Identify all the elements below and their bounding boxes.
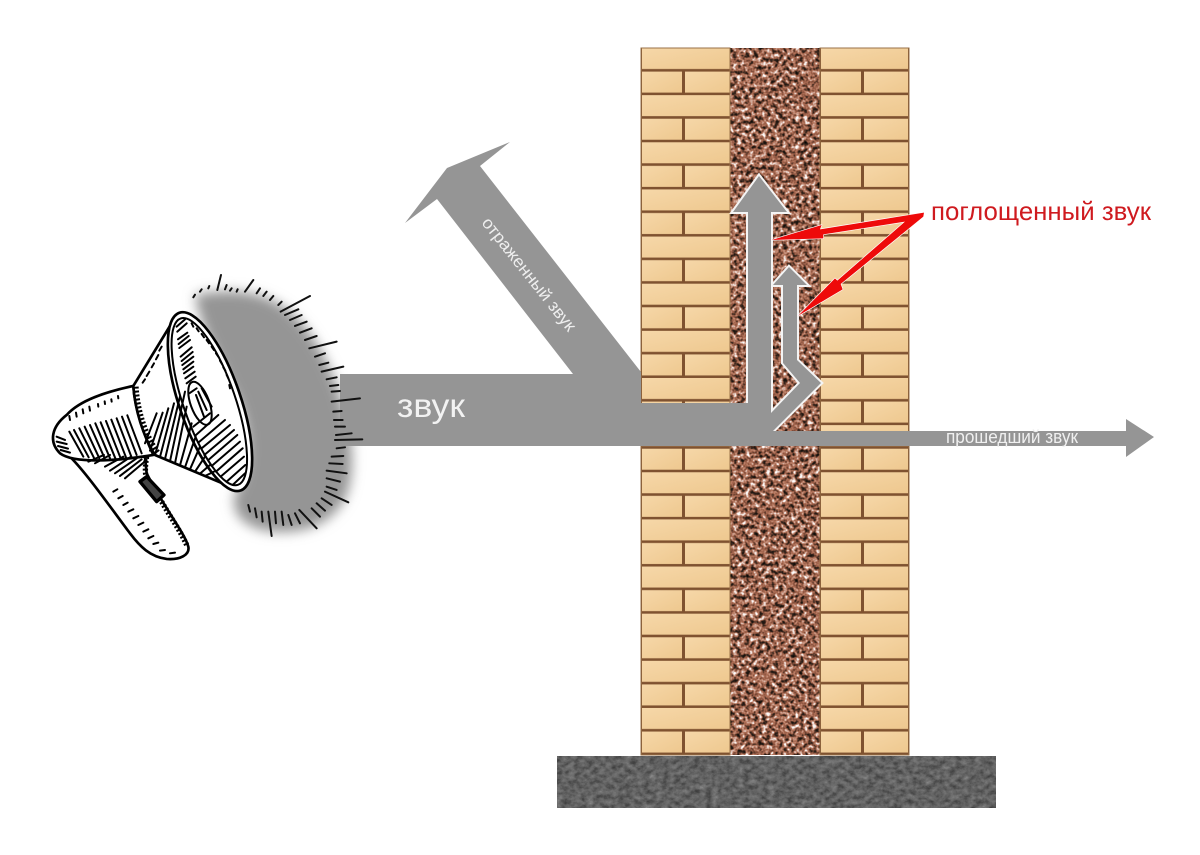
megaphone stipple bbox=[69, 323, 230, 553]
white outline of absorbed sound arrows bbox=[733, 176, 821, 433]
megaphone rear body bbox=[53, 386, 153, 460]
red pointer arrows bbox=[772, 213, 924, 316]
right brick layer bbox=[820, 48, 909, 755]
megaphone handle bbox=[70, 457, 188, 559]
icon: megaphone bbox=[53, 303, 270, 559]
megaphone grip stitching bbox=[145, 457, 187, 545]
main sound arrows: incident, reflected, absorbed and transmitted bbox=[340, 142, 1154, 457]
megaphone cone bbox=[133, 315, 237, 489]
label: absorbed sound: поглощенный звук bbox=[931, 196, 1152, 226]
megaphone rim bbox=[150, 303, 270, 501]
wall bbox=[641, 48, 909, 755]
megaphone trigger bbox=[140, 477, 164, 502]
label: reflected sound: отраженный звук bbox=[478, 214, 580, 336]
sound source burst blob bbox=[195, 291, 352, 532]
label: transmitted sound: прошедший звук bbox=[946, 427, 1078, 447]
left brick layer bbox=[641, 48, 730, 755]
concrete foundation bbox=[557, 756, 996, 808]
label: sound: звук bbox=[397, 387, 466, 424]
megaphone inner rim bbox=[156, 310, 263, 493]
gravel fill layer bbox=[730, 48, 820, 755]
megaphone neck band bbox=[136, 387, 158, 453]
megaphone driver bbox=[183, 379, 217, 428]
burst tick marks bbox=[193, 275, 362, 536]
megaphone hatching bbox=[57, 319, 245, 485]
